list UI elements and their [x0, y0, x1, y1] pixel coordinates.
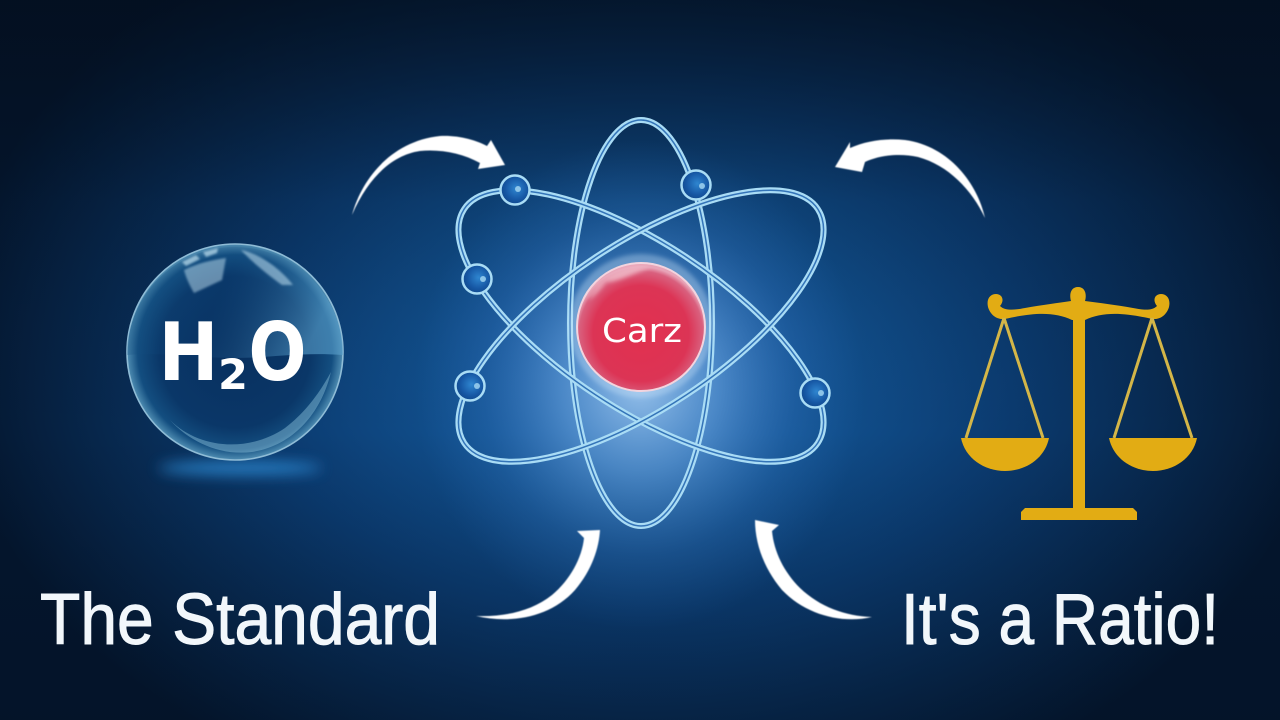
left pan	[961, 438, 1049, 471]
arrow: top right, curving into the atom	[835, 139, 985, 218]
scale post	[1073, 316, 1085, 510]
icon: water sphere with H2O	[127, 244, 343, 475]
sphere shadow glow	[158, 461, 322, 475]
glass sphere	[127, 244, 343, 460]
window highlights	[182, 248, 293, 293]
label: It's a Ratio!: It's a Ratio!	[901, 580, 1219, 660]
H2O label	[158, 306, 306, 399]
icon: golden balance scale	[961, 287, 1197, 520]
lower crescent	[170, 372, 331, 453]
arrow: top left, curving into the atom	[352, 136, 505, 215]
nucleus	[569, 254, 713, 398]
label: The Standard: The Standard	[40, 580, 440, 660]
right pan strings	[1114, 318, 1192, 438]
scale base	[1021, 508, 1137, 520]
right pan	[1109, 438, 1197, 471]
H2O label: H	[158, 306, 218, 399]
arrow: bottom left, curving up to the atom	[476, 530, 600, 619]
orbit rings	[419, 120, 863, 526]
scale beam	[988, 287, 1169, 320]
arrow: bottom right, curving up to the atom	[755, 520, 872, 619]
electron highlights	[474, 183, 824, 396]
nucleus label: Carz	[602, 311, 682, 350]
atom diagram	[419, 120, 863, 526]
electrons	[456, 170, 830, 408]
left pan strings	[966, 318, 1043, 438]
H2O label: 2	[218, 350, 248, 399]
H2O label: O	[248, 306, 306, 399]
upper reflection	[127, 247, 343, 358]
